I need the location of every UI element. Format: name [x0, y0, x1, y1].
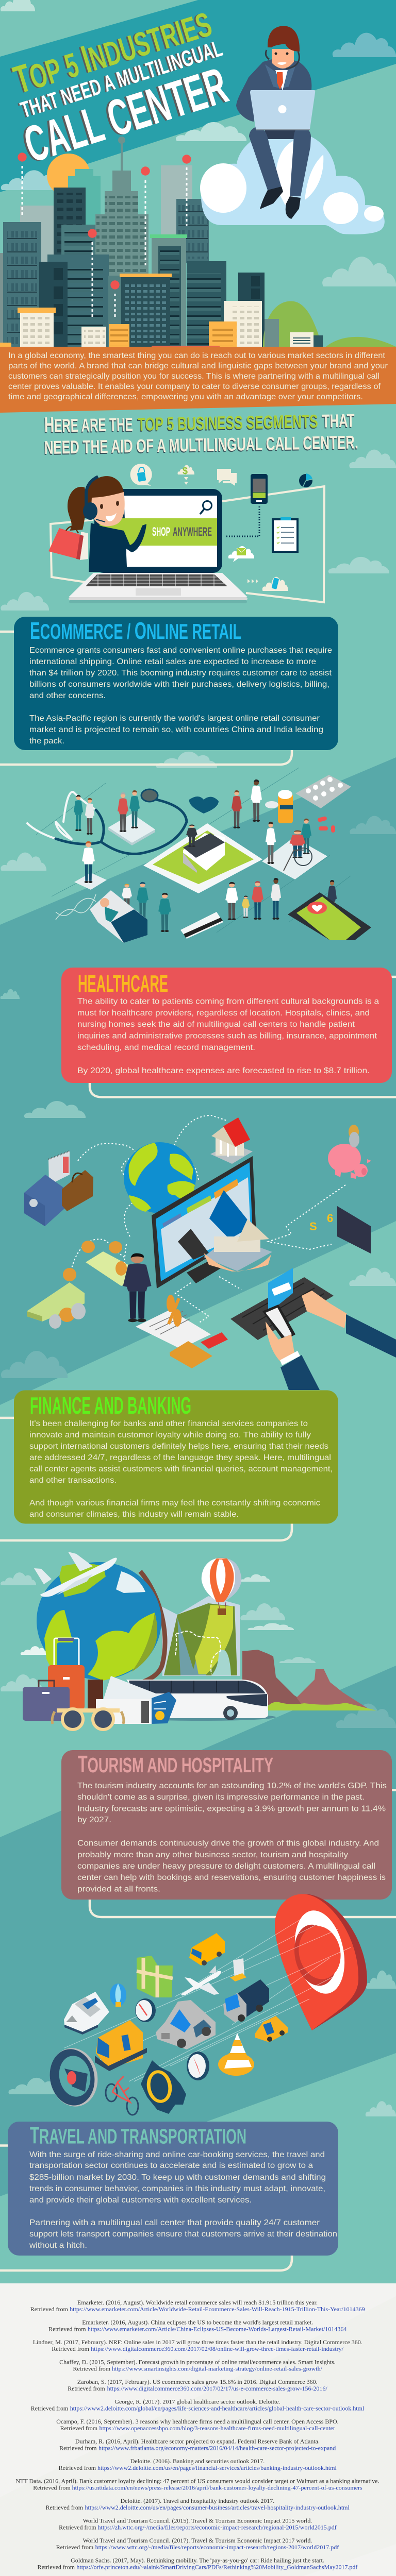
text: travel: without a hitch.: [29, 2241, 87, 2250]
shopping agent: [48, 476, 146, 572]
references: George, R. (2017). 2017 global healthcare sector outlook. Deloitte.: [114, 2398, 280, 2405]
references: Emarketer. (2016, August). China eclipses the US to become the world's largest retail market.: [82, 2318, 313, 2326]
references: https://www.digitalcommerce360.com/2017/02/17/us-e-commerce-sales-grow-156-2016/: [107, 2385, 327, 2392]
text: tourism: Consumer demands continuously drive the growth of this global industry. And: [77, 1839, 379, 1848]
text: tourism: shouldn't come as a surprise, given its impressive performance in the past.: [77, 1793, 365, 1802]
heading: healthcare: HEALTHCARE: [78, 970, 168, 997]
stethoscope: [27, 789, 187, 854]
panel: tourism: [61, 1750, 392, 1900]
delivery truck: [223, 1979, 269, 2022]
text: ecommerce: [29, 646, 332, 745]
heading line 1: THAT: [322, 410, 355, 432]
text: ecommerce: and other concerns.: [29, 691, 106, 700]
money stacks and coins: [27, 1241, 143, 1329]
title: [9, 1, 234, 173]
big cloud: [201, 130, 385, 234]
heading: travel: TRAVEL AND TRANSPORTATION: [30, 2122, 246, 2148]
speed gauge: [135, 1998, 156, 2022]
agent figure: [236, 26, 311, 219]
piggy bank: [328, 1125, 371, 1179]
text: healthcare: By 2020, global healthcare expenses are forecasted to rise to $8.7 trillion.: [77, 1066, 370, 1075]
title line 3: CALL CENTER: [18, 56, 234, 173]
references: https://www.frbatlanta.org/economy-matters/2016/04/14/health-care-sector-projected-to-expand: [98, 2444, 336, 2451]
illustration: online shopping laptop: [48, 464, 324, 603]
suv: [156, 2000, 216, 2049]
panel: finance: [14, 1390, 338, 1524]
intro text: In a global economy, the smartest thing you can do is reach out to various market sectors in different: [8, 351, 386, 360]
hand holding bank: [178, 1190, 272, 1272]
currency board: [309, 1206, 371, 1253]
airplane: [34, 1552, 117, 1597]
footer background: [0, 2283, 396, 2576]
intro panel: [0, 347, 396, 413]
platforms and tablet: [74, 814, 327, 893]
references: Retrieved from: [52, 2345, 90, 2352]
references: https://www2.deloitte.com/us/en/pages/consumer-business/articles/travel-hospitality-industry-outlook.html: [85, 2504, 350, 2511]
illustration: transportation: [45, 1894, 367, 2115]
hospital bed: [90, 890, 147, 943]
text: travel: With the surge of ride-sharing and online car-booking services, the travel and: [29, 2150, 325, 2159]
intro text: [8, 351, 388, 401]
heading line 1: HERE ARE THE: [44, 411, 133, 437]
text: finance: call center agents assist customers with financial queries, account management,: [29, 1465, 333, 1473]
section heading: [44, 407, 358, 458]
references: Retrieved from: [59, 2444, 97, 2451]
text: finance: innovate and maintain customer loyalty while doing so. The ability to fully: [29, 1431, 311, 1439]
text: healthcare: The ability to cater to patients coming from different cultural backgrounds is a: [77, 997, 379, 1006]
text: tourism: Industry forecasts are optimistic, expecting a 3.9% growth per annum to 11.4%: [77, 1804, 386, 1814]
references: Retrieved from: [48, 2325, 86, 2332]
references: https://www.openaccessbpo.com/blog/3-reasons-healthcare-firms-need-multilingual-call-center: [99, 2425, 335, 2432]
speed lines: [64, 1914, 351, 2081]
medical staff and patients: [74, 779, 337, 932]
travel tickets: [96, 1676, 176, 1724]
invoice, percent, card and wallet: [136, 1295, 228, 1368]
illustration: tourism: [23, 1552, 376, 1730]
location pins: [18, 152, 191, 319]
heading: finance: FINANCE AND BANKING: [30, 1392, 191, 1419]
references: Retrieved from: [68, 2385, 105, 2392]
smartphone with heart: [288, 892, 371, 940]
heading: ecommerce: ECOMMERCE / ONLINE RETAIL: [30, 617, 241, 644]
text: finance: are addressed 24/7, regardless of the language they speak. Here, multilingual: [29, 1453, 331, 1462]
steering wheel: [45, 2044, 102, 2110]
ship: [64, 1992, 109, 2035]
floating icons: [130, 464, 312, 591]
text: tourism: provided at all fronts.: [77, 1885, 160, 1894]
text: ecommerce: The Asia-Pacific region is currently the world's largest online retail consumer: [29, 714, 320, 723]
canyon rocks and grass: [242, 1650, 376, 1710]
references: https://www.emarketer.com/Article/Worldwide-Retail-Ecommerce-Sales-Will-Reach-1915-Trillion-This-Year/1014369: [70, 2306, 365, 2313]
references: https://www.wttc.org/-/media/files/reports/economic-impact-research/regions-2017/world2017.pdf: [95, 2544, 339, 2551]
airplane: [182, 1965, 221, 1995]
intro text: center proves valuable. It enables your company to cater to diverse consumer groups, regardless of: [8, 382, 381, 391]
currency board: 6: [327, 1212, 333, 1225]
references: Zaroban, S. (2017, February). US ecommerce sales grow 15.6% in 2016. Digital Commerce 360.: [77, 2378, 318, 2385]
text: travel: support lets transport companies ensure that customers arrive at their destination: [29, 2230, 337, 2239]
hot air balloon: [202, 1558, 241, 1615]
dna helix: [56, 894, 96, 920]
text: travel: Partnering with a multilingual call center that provide quality 24/7 customer: [29, 2218, 320, 2227]
globe: [124, 1142, 196, 1213]
heading line 1: [44, 407, 355, 437]
references: Retrieved from: [37, 2563, 75, 2570]
text: finance: and other transactions.: [29, 1476, 117, 1485]
text: healthcare: scheduling, and medical record management.: [77, 1043, 255, 1052]
references: Emarketer. (2016, August). Worldwide retail ecommerce sales will reach $1.915 trillion this year.: [77, 2299, 318, 2306]
front buildings: [0, 222, 396, 347]
text: finance: and consumer climates, this industry will remain stable.: [29, 1510, 239, 1519]
laptop: [69, 489, 248, 603]
monitor: [152, 1156, 256, 1289]
compass: [187, 2052, 209, 2080]
circuit lines: [36, 768, 351, 933]
floating icons: $: [183, 466, 188, 476]
text: travel: and provide their global customers with excellent services.: [29, 2196, 252, 2205]
banner text: SHOP: [152, 525, 170, 539]
text: healthcare: nursing homes seek the aid of multilingual call centers to handle patient: [77, 1020, 355, 1029]
references: Retrieved from: [56, 2544, 94, 2551]
text: ecommerce: than $4 trillion by 2020. This booming industry requires customer care to assist: [29, 669, 332, 677]
panel: ecommerce: [14, 617, 338, 750]
text: ecommerce: Ecommerce grants consumers fast and convenient online purchases that require: [29, 646, 332, 655]
references: Retrieved from: [59, 2464, 96, 2471]
gear: [141, 2060, 186, 2114]
references: Ocampo, F. (2016, September). 3 reasons why healthcare firms need a multilingual call center. Open Access BPO.: [56, 2418, 339, 2425]
references: Retrieved from: [73, 2365, 111, 2372]
banner text: ANYWHERE: [173, 525, 212, 539]
text: tourism: probably more than any other business sector, tourism and hospitality: [77, 1851, 348, 1859]
intro text: parts of the world. A brand that can bridge cultural and linguistic gaps between your brand and your: [8, 362, 388, 370]
bank agent: [123, 1253, 152, 1322]
bicycle: [106, 2076, 138, 2115]
references: Chaffey, D. (2015, September). Forecast growth in percentage of online retail/ecommerce sales. Smart Insights.: [59, 2359, 336, 2366]
bus: [126, 1680, 276, 1721]
references: Retrieved from: [59, 2523, 96, 2531]
sun: [47, 154, 90, 197]
references: https://www.emarketer.com/Article/China-Eclipses-US-Become-Worlds-Largest-Retail-Market/1014364: [88, 2325, 346, 2332]
road map: [137, 1956, 173, 1997]
text: travel: $285-billion market by 2030. To keep up with customer demands and shifting: [29, 2173, 326, 2182]
references: https://us.nttdata.com/en/news/press-release/2016/april/bank-customer-loyalty-declining-47-percent-of-us-consumers: [72, 2484, 362, 2491]
references: Retrieved from: [46, 2504, 84, 2511]
references: Retrieved from: [33, 2484, 71, 2491]
taxi: [255, 2016, 288, 2042]
heading line 1: TOP 5 BUSINESS SEGMENTS: [137, 411, 318, 435]
location pin: [275, 1894, 367, 2030]
text: finance: [29, 1419, 333, 1519]
references: Durham, R. (2016, April). Healthcare sector projected to expand. Federal Reserve Bank of Atlanta.: [75, 2438, 320, 2445]
text: ecommerce: the pack.: [29, 737, 64, 745]
references: World Travel and Tourism Council. (2017). Travel & Tourism Economic Impact 2017 world.: [83, 2537, 312, 2544]
text: travel: trends in consumer behavior, companies in this industry must adapt, innovate,: [29, 2184, 325, 2193]
currency board: S: [309, 1220, 317, 1233]
references: https://www.smartinsights.com/digital-marketing-strategy/online-retail-sales-growth/: [112, 2365, 323, 2372]
text: travel: [29, 2150, 337, 2250]
keyboard and hands: [230, 1268, 396, 1390]
dotted network lines: [70, 1115, 345, 1323]
text: finance: support international customers definitely helps here, ensuring that their needs: [29, 1442, 328, 1451]
references: https://www2.deloitte.com/global/en/pages/life-sciences-and-healthcare/articles/global-health-care-sector-outlook.html: [70, 2404, 365, 2412]
intro text: time and geographical differences, empowering you with an advantage over your competitors.: [8, 393, 363, 401]
text: tourism: The tourism industry accounts for an astounding 10.2% of the world's GDP. This: [77, 1782, 387, 1790]
references: Lindner, M. (2017, February). NRF: Online sales in 2017 will grow three times faster than the retail industry. Digital Commerce 360.: [33, 2338, 362, 2346]
connector lines: [0, 632, 396, 2270]
references: Retrieved from: [60, 2425, 98, 2432]
references: https://www.digitalcommerce360.com/2017/02/08/online-will-grow-three-times-faster-retail-industry/: [91, 2345, 344, 2352]
vehicles and road items: [45, 1933, 288, 2115]
laptop: [250, 90, 315, 129]
panel: healthcare: [61, 968, 392, 1083]
text: travel: transportation sector continues to accelerate and is estimated to grow to a: [29, 2161, 313, 2170]
illustration: agent on a cloud: [200, 26, 385, 234]
panel: travel: [8, 2122, 338, 2256]
city skyline illustration: [0, 137, 396, 347]
back buildings: [20, 137, 209, 281]
text: ecommerce: billions of consumers worldwide with their purchases, delivery logistics, billing,: [29, 680, 329, 689]
text: tourism: center can help with bookings and reservations, ensuring customer happiness is: [77, 1873, 386, 1882]
text: healthcare: inquiries and administrative processes such as billing, insurance, appointment: [77, 1031, 377, 1041]
text: tourism: by 2027.: [77, 1816, 111, 1824]
folded map: [161, 1596, 240, 1676]
text: tourism: [77, 1782, 387, 1894]
references: Deloitte. (2016). Banking and securities outlook 2017.: [130, 2458, 265, 2465]
references: Retrieved from: [30, 2306, 68, 2313]
text: healthcare: [77, 997, 379, 1075]
references: NTT Data. (2016, April). Bank customer loyalty declining: 47 percent of US consumers would consider target or Walmart as a banking alternative.: [15, 2477, 380, 2484]
heading: tourism: TOURISM AND HOSPITALITY: [78, 1751, 273, 1777]
text: finance: It's been challenging for banks and other financial services companies to: [29, 1419, 308, 1428]
references: https://zh.wttc.org/-/media/files/reports/economic-impact-research/regional-2015/world2015.pdf: [98, 2523, 337, 2531]
title line 2: THAT NEED A MULTILINGUAL: [18, 36, 225, 123]
id card: [180, 912, 223, 939]
references: https://orfe.princeton.edu/~alaink/SmartDrivingCars/PDFs/Rethinking%20Mobility_GoldmanSachsMay2017.pdf: [76, 2563, 357, 2570]
text: ecommerce: international shipping. Online retail sales are expected to increase to more: [29, 657, 316, 666]
intro text: customers can strategically position you for success. This is where partnering with a multilingual call: [8, 372, 380, 381]
globe with stand: [37, 1562, 165, 1710]
references: Retrieved from: [31, 2404, 69, 2412]
text: finance: And though various financial firms may feel the constantly shifting economic: [29, 1499, 320, 1507]
traffic cone: [218, 2033, 254, 2076]
desk and pills: [183, 775, 351, 873]
text: healthcare: must for healthcare providers, regardless of location. Hospitals, clinics, and: [77, 1009, 370, 1018]
balloon: [110, 1984, 126, 2007]
illustration: finance: [24, 1115, 396, 1390]
sunglasses: [52, 1709, 124, 1730]
text: ecommerce: market and is projected to remain so, with countries China and India leading: [29, 725, 323, 734]
luggage: [23, 1638, 85, 1721]
references: https://www2.deloitte.com/us/en/pages/financial-services/articles/banking-industry-outlook.html: [97, 2464, 337, 2471]
safe, calendar and briefcase: [24, 1151, 93, 1226]
references: World Travel and Tourism Council. (2015). Travel & Tourism Economic Impact 2015 world.: [83, 2517, 312, 2524]
references: Goldman Sachs. (2017, May). Rethinking mobility. The 'pay-as-you-go' car: Ride hailing just the start.: [71, 2556, 324, 2564]
train: [95, 2020, 147, 2071]
references: Deloitte. (2017). Travel and hospitality industry outlook 2017.: [121, 2497, 274, 2504]
text: tourism: companies are under heavy pressure to delight customers. A multilingual call: [77, 1862, 375, 1871]
illustration: healthcare: [27, 768, 371, 943]
fuel pump: [230, 1958, 246, 1981]
school bus: [189, 1933, 225, 1965]
banner text: [152, 525, 212, 539]
bank building: [210, 1117, 253, 1164]
references: [15, 2299, 380, 2576]
cream frame: [51, 486, 324, 602]
